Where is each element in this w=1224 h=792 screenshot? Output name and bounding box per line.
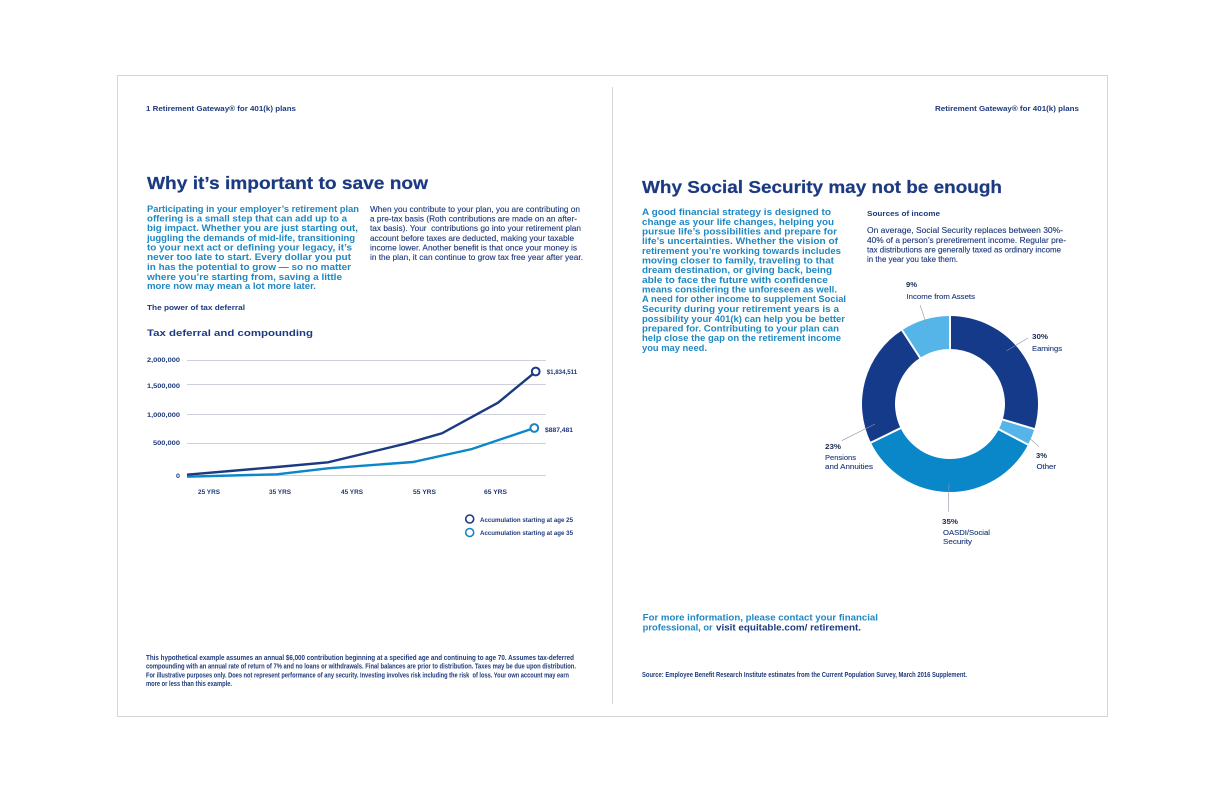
donut label: income from assets bbox=[906, 282, 975, 301]
chart title: Tax deferral and compounding bbox=[147, 327, 313, 338]
segment: earnings 30% bbox=[950, 316, 1038, 429]
call to action: visit equitable.com/ retirement. bbox=[716, 623, 861, 633]
left lead paragraph: big impact. Whether you are just starting out, bbox=[147, 223, 358, 233]
donut label: pensions and annuities: Pensions bbox=[825, 453, 856, 462]
left body paragraph: account before taxes are deducted, making your taxable bbox=[370, 234, 575, 243]
call to action: professional, or bbox=[643, 623, 713, 633]
left lead paragraph: never too late to start. Every dollar you put bbox=[147, 252, 351, 262]
donut label: earnings: Earnings bbox=[1032, 344, 1062, 353]
right lead paragraph: pursue life’s possibilities and prepare for bbox=[642, 226, 837, 236]
call to action: For more information, please contact your financial bbox=[643, 612, 878, 622]
right lead paragraph: Security during your retirement years is a bbox=[642, 304, 840, 314]
left footnote: This hypothetical example assumes an annual $6,000 contribution beginning at a specified age and continuing to age 70. Assumes tax-deferred bbox=[146, 653, 574, 662]
right lead paragraph: retirement you’re working towards includes bbox=[642, 246, 841, 256]
subheading: sources of income: Sources of income bbox=[867, 209, 940, 218]
left body paragraph: a pre-tax basis (Roth contributions are made on an after- bbox=[370, 214, 577, 224]
right lead paragraph: you may need. bbox=[642, 343, 707, 353]
right lead paragraph: change as your life changes, helping you bbox=[642, 217, 834, 227]
left body paragraph bbox=[370, 205, 583, 262]
left lead paragraph: offering is a small step that can add up to a bbox=[147, 214, 348, 224]
right lead paragraph: A need for other income to supplement Social bbox=[642, 294, 846, 304]
right lead paragraph: help close the gap on the retirement income bbox=[642, 333, 841, 343]
right lead paragraph: means considering the unforeseen as well. bbox=[642, 284, 837, 294]
right body paragraph: On average, Social Security replaces between 30%- bbox=[867, 226, 1063, 235]
donut label: OASDI / social security: Security bbox=[943, 537, 972, 546]
donut label: earnings bbox=[1032, 334, 1062, 353]
chart legend: Accumulation starting at age 25 bbox=[480, 517, 574, 524]
x axis labels: 45 YRS bbox=[341, 489, 363, 496]
right lead paragraph: possibility your 401(k) can help you be better bbox=[642, 314, 845, 324]
right page header: Retirement Gateway® for 401(k) plans bbox=[935, 104, 1079, 113]
donut label: pensions and annuities: and Annuities bbox=[825, 462, 873, 471]
left lead paragraph: more now may mean a lot more later. bbox=[147, 281, 316, 291]
x axis labels: 55 YRS bbox=[413, 489, 436, 496]
y axis labels: 1,500,000 bbox=[147, 383, 181, 390]
left title: Why it’s important to save now bbox=[147, 173, 428, 193]
subheading: power of tax deferral: The power of tax deferral bbox=[147, 303, 245, 312]
left footnote bbox=[146, 653, 576, 688]
source note: Source: Employee Benefit Research Institute estimates from the Current Population Survey, March 2016 Supplement. bbox=[642, 670, 967, 679]
left body paragraph: When you contribute to your plan, you are contributing on bbox=[370, 205, 580, 214]
right lead paragraph: able to face the future with confidence bbox=[642, 275, 828, 285]
donut label: income from assets: Income from Assets bbox=[906, 292, 975, 301]
series: starting at age 35 bbox=[187, 424, 538, 477]
right lead paragraph: A good financial strategy is designed to bbox=[642, 207, 831, 217]
right lead paragraph bbox=[642, 207, 846, 353]
segment: pensions 23% bbox=[862, 330, 920, 443]
left lead paragraph: Participating in your employer’s retirement plan bbox=[147, 204, 359, 214]
y axis labels: 1,000,000 bbox=[147, 412, 181, 419]
segment: OASDI 35% bbox=[871, 428, 1028, 492]
donut label: earnings: 30% bbox=[1032, 334, 1049, 341]
right body paragraph: 40% of a person’s preretirement income. Regular pre- bbox=[867, 236, 1066, 245]
right lead paragraph: prepared for. Contributing to your plan can bbox=[642, 324, 839, 334]
segment: assets 9% bbox=[902, 316, 950, 358]
left body paragraph: tax basis). Your contributions go into your retirement plan bbox=[370, 224, 581, 233]
donut label: pensions and annuities: 23% bbox=[825, 444, 842, 451]
right body paragraph: tax distributions are generally taxed as ordinary income bbox=[867, 246, 1062, 254]
left body paragraph: in the plan, it can continue to grow tax free year after year. bbox=[370, 253, 583, 262]
end value labels bbox=[545, 369, 578, 434]
end value labels: $887,481 bbox=[545, 427, 574, 434]
right body paragraph bbox=[867, 226, 1066, 264]
chart legend bbox=[466, 515, 574, 537]
left footnote: more or less than this example. bbox=[146, 679, 232, 688]
chart legend: Accumulation starting at age 35 bbox=[480, 530, 574, 537]
donut label: OASDI / social security: OASDI/Social bbox=[943, 528, 990, 537]
x axis labels: 65 YRS bbox=[484, 489, 507, 496]
donut label: other bbox=[1036, 453, 1057, 471]
left footnote: For illustrative purposes only. Does not represent performance of any security. Investing involves risk including the risk of loss. Your own account may earn bbox=[146, 670, 569, 680]
left lead paragraph: juggling the demands of mid-life, transitioning bbox=[146, 233, 355, 243]
donut label: other: 3% bbox=[1036, 453, 1048, 460]
call to action bbox=[643, 612, 878, 633]
donut label: pensions and annuities bbox=[825, 444, 873, 471]
y axis labels: 500,000 bbox=[153, 440, 181, 447]
donut label: income from assets: 9% bbox=[906, 282, 918, 289]
end value labels: $1,834,511 bbox=[547, 369, 578, 376]
right title: Why Social Security may not be enough bbox=[642, 177, 1002, 197]
x axis labels: 25 YRS bbox=[198, 489, 220, 496]
x axis labels: 35 YRS bbox=[269, 489, 291, 496]
line chart bbox=[147, 357, 578, 496]
donut label: OASDI / social security: 35% bbox=[942, 519, 959, 526]
donut chart: sources of income bbox=[842, 305, 1039, 512]
donut label: OASDI / social security bbox=[942, 519, 990, 546]
y axis labels: 0 bbox=[176, 473, 181, 480]
y axis labels: 2,000,000 bbox=[147, 357, 181, 364]
left body paragraph: income lower. Another benefit is that once your money is bbox=[370, 244, 577, 252]
series: starting at age 25 bbox=[187, 368, 540, 475]
right lead paragraph: moving closer to family, traveling to that bbox=[642, 256, 834, 266]
left lead paragraph bbox=[146, 204, 359, 291]
x axis labels bbox=[198, 489, 507, 496]
right lead paragraph: life’s uncertainties. Whether the vision of bbox=[642, 236, 839, 246]
left page header: 1 Retirement Gateway® for 401(k) plans bbox=[146, 104, 296, 113]
right lead paragraph: dream destination, or giving back, being bbox=[642, 265, 832, 275]
left footnote: compounding with an annual rate of return of 7% and no loans or withdrawals. Final balances are prior to distribution. Taxes may be due upon distribution. bbox=[146, 662, 576, 670]
left lead paragraph: where you’re starting from, saving a little bbox=[146, 272, 342, 282]
donut label: other: Other bbox=[1036, 462, 1057, 471]
left lead paragraph: in has the potential to grow — so no matter bbox=[147, 262, 351, 272]
left lead paragraph: to your next act or defining your legacy, it’s bbox=[147, 242, 352, 252]
right body paragraph: in the year you take them. bbox=[867, 255, 958, 264]
y axis labels bbox=[147, 357, 181, 480]
segment: other 3% bbox=[999, 420, 1034, 445]
